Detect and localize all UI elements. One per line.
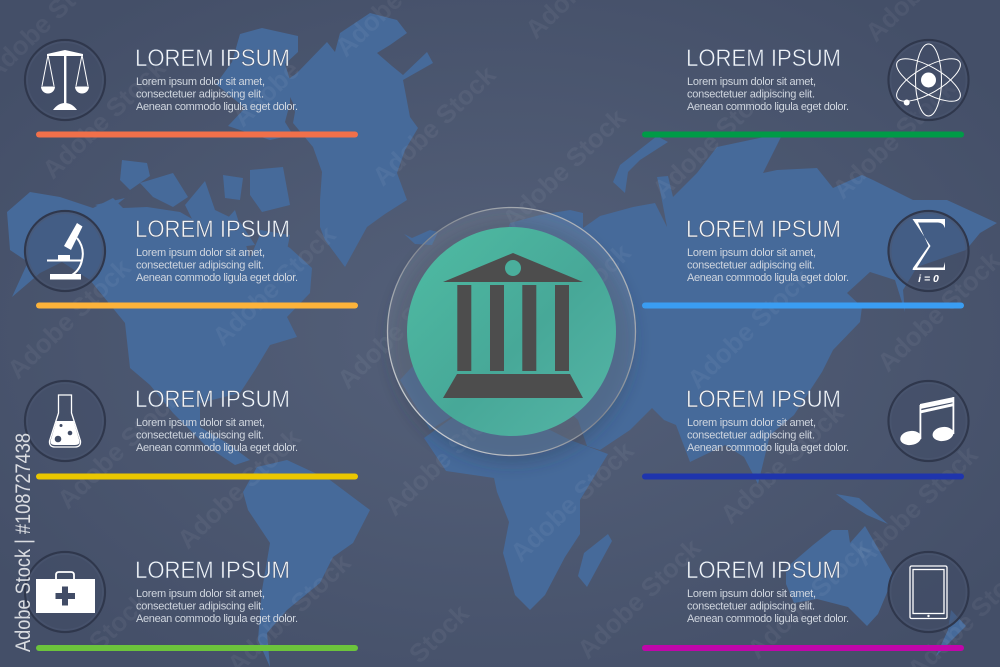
map: africa xyxy=(424,405,608,610)
map: greenland xyxy=(283,13,433,267)
heading: LOREM IPSUM xyxy=(686,216,841,243)
watermarks: Stock xyxy=(83,586,155,657)
text block: Lorem ipsum dolor sit amet, xyxy=(136,247,265,259)
text block: Aenean commodo ligula eget dolor. xyxy=(687,272,849,284)
watermarks: Adobe Stock xyxy=(848,439,984,572)
watermarks: Adobe Stock xyxy=(171,422,307,555)
panel: row 4 left xyxy=(25,552,358,651)
heading: LOREM IPSUM xyxy=(135,45,290,72)
panel: row 3 right xyxy=(642,381,968,480)
map: south america xyxy=(243,460,370,667)
icon: music notes xyxy=(888,381,968,461)
icon: tablet xyxy=(888,552,968,632)
text block: Aenean commodo ligula eget dolor. xyxy=(687,442,849,454)
text block xyxy=(687,588,849,625)
text block: Aenean commodo ligula eget dolor. xyxy=(687,101,849,113)
watermarks: Adobe Stock xyxy=(1,252,137,385)
text block: Aenean commodo ligula eget dolor. xyxy=(136,613,298,625)
map: australia xyxy=(786,526,894,626)
text block xyxy=(136,76,298,113)
divider: navy xyxy=(642,474,964,480)
watermarks: Adobe Stock xyxy=(504,435,640,568)
panel: row 3 left xyxy=(25,381,358,480)
map: madagascar xyxy=(578,534,612,587)
map: arctic islands xyxy=(95,28,298,260)
text block xyxy=(136,417,298,454)
icon: bank building xyxy=(443,253,583,398)
map: new guinea xyxy=(836,494,888,524)
watermarks: Adobe Stock xyxy=(741,532,877,665)
heading: LOREM IPSUM xyxy=(686,386,841,413)
divider: yellow xyxy=(36,474,358,480)
text block: consectetuer adipiscing elit. xyxy=(136,260,264,272)
watermarks: Adobe Stock xyxy=(646,72,782,205)
watermarks: Adobe Stock xyxy=(681,262,817,395)
text block xyxy=(687,76,849,113)
panel: row 1 right xyxy=(642,40,968,138)
divider: orange xyxy=(36,132,358,138)
divider: blue xyxy=(642,302,964,308)
icon: scales xyxy=(25,40,105,120)
text block xyxy=(687,247,849,284)
panel: row 2 left xyxy=(25,211,358,308)
divider: green xyxy=(36,645,358,651)
watermarks: Adobe Stock xyxy=(571,532,707,665)
text block: consectetuer adipiscing elit. xyxy=(687,260,815,272)
divider: magenta xyxy=(642,645,964,651)
icon: sigma: i = 0 xyxy=(918,273,939,285)
map: iceland xyxy=(404,230,438,245)
divider: green xyxy=(642,132,964,138)
panel: row 1 left xyxy=(25,40,358,138)
text block: Lorem ipsum dolor sit amet, xyxy=(136,417,265,429)
stock credit: Adobe Stock | #108727438 xyxy=(12,433,35,652)
icon: atom xyxy=(888,40,968,120)
heading: LOREM IPSUM xyxy=(686,45,841,72)
text block xyxy=(687,417,849,454)
text block xyxy=(136,247,298,284)
map: eurasia xyxy=(400,133,997,484)
map: new zealand xyxy=(936,610,966,656)
text block: Lorem ipsum dolor sit amet, xyxy=(687,588,816,600)
icon: flask xyxy=(25,381,105,461)
central emblem: glass disc xyxy=(388,208,636,464)
text block: Aenean commodo ligula eget dolor. xyxy=(136,442,298,454)
text block: Lorem ipsum dolor sit amet, xyxy=(136,76,265,88)
watermarks: Adobe Stock xyxy=(366,59,502,192)
icon: microscope xyxy=(25,211,105,291)
watermarks: Adobe Stock xyxy=(714,397,850,530)
text block: consectetuer adipiscing elit. xyxy=(136,600,264,612)
icon: sigma xyxy=(888,211,968,291)
map: arctic arc island xyxy=(613,136,668,193)
watermarks: Adobe Stock xyxy=(36,52,172,185)
text block: Aenean commodo ligula eget dolor. xyxy=(136,101,298,113)
text block: Lorem ipsum dolor sit amet, xyxy=(687,76,816,88)
watermarks: Adobe Stock xyxy=(206,219,342,352)
watermarks: Adobe Stock xyxy=(826,72,962,205)
heading: LOREM IPSUM xyxy=(135,216,290,243)
watermarks: Adobe Stock xyxy=(51,382,187,515)
watermarks: Adobe Stock xyxy=(378,389,514,522)
watermarks: Adobe xyxy=(226,55,305,132)
watermarks: Stock xyxy=(403,598,475,667)
text block: consectetuer adipiscing elit. xyxy=(687,600,815,612)
divider: amber xyxy=(36,302,358,308)
text block: consectetuer adipiscing elit. xyxy=(136,430,264,442)
icon: medical kit xyxy=(25,552,105,632)
panel: row 4 right xyxy=(642,552,968,651)
heading: LOREM IPSUM xyxy=(135,557,290,584)
text block: Lorem ipsum dolor sit amet, xyxy=(136,588,265,600)
watermarks: Adobe Stock xyxy=(501,237,637,370)
text block: consectetuer adipiscing elit. xyxy=(687,430,815,442)
text block: Lorem ipsum dolor sit amet, xyxy=(687,417,816,429)
heading: LOREM IPSUM xyxy=(135,386,290,413)
text block xyxy=(136,588,298,625)
text block: Lorem ipsum dolor sit amet, xyxy=(687,247,816,259)
text block: Aenean commodo ligula eget dolor. xyxy=(136,272,298,284)
watermarks: Adobe Stock xyxy=(496,102,632,235)
panel: row 2 right xyxy=(642,211,968,308)
map: north america xyxy=(7,192,312,465)
text block: consectetuer adipiscing elit. xyxy=(687,88,815,100)
watermarks: Adobe Stock xyxy=(331,262,467,395)
text block: Aenean commodo ligula eget dolor. xyxy=(687,613,849,625)
heading: LOREM IPSUM xyxy=(686,557,841,584)
text block: consectetuer adipiscing elit. xyxy=(136,88,264,100)
